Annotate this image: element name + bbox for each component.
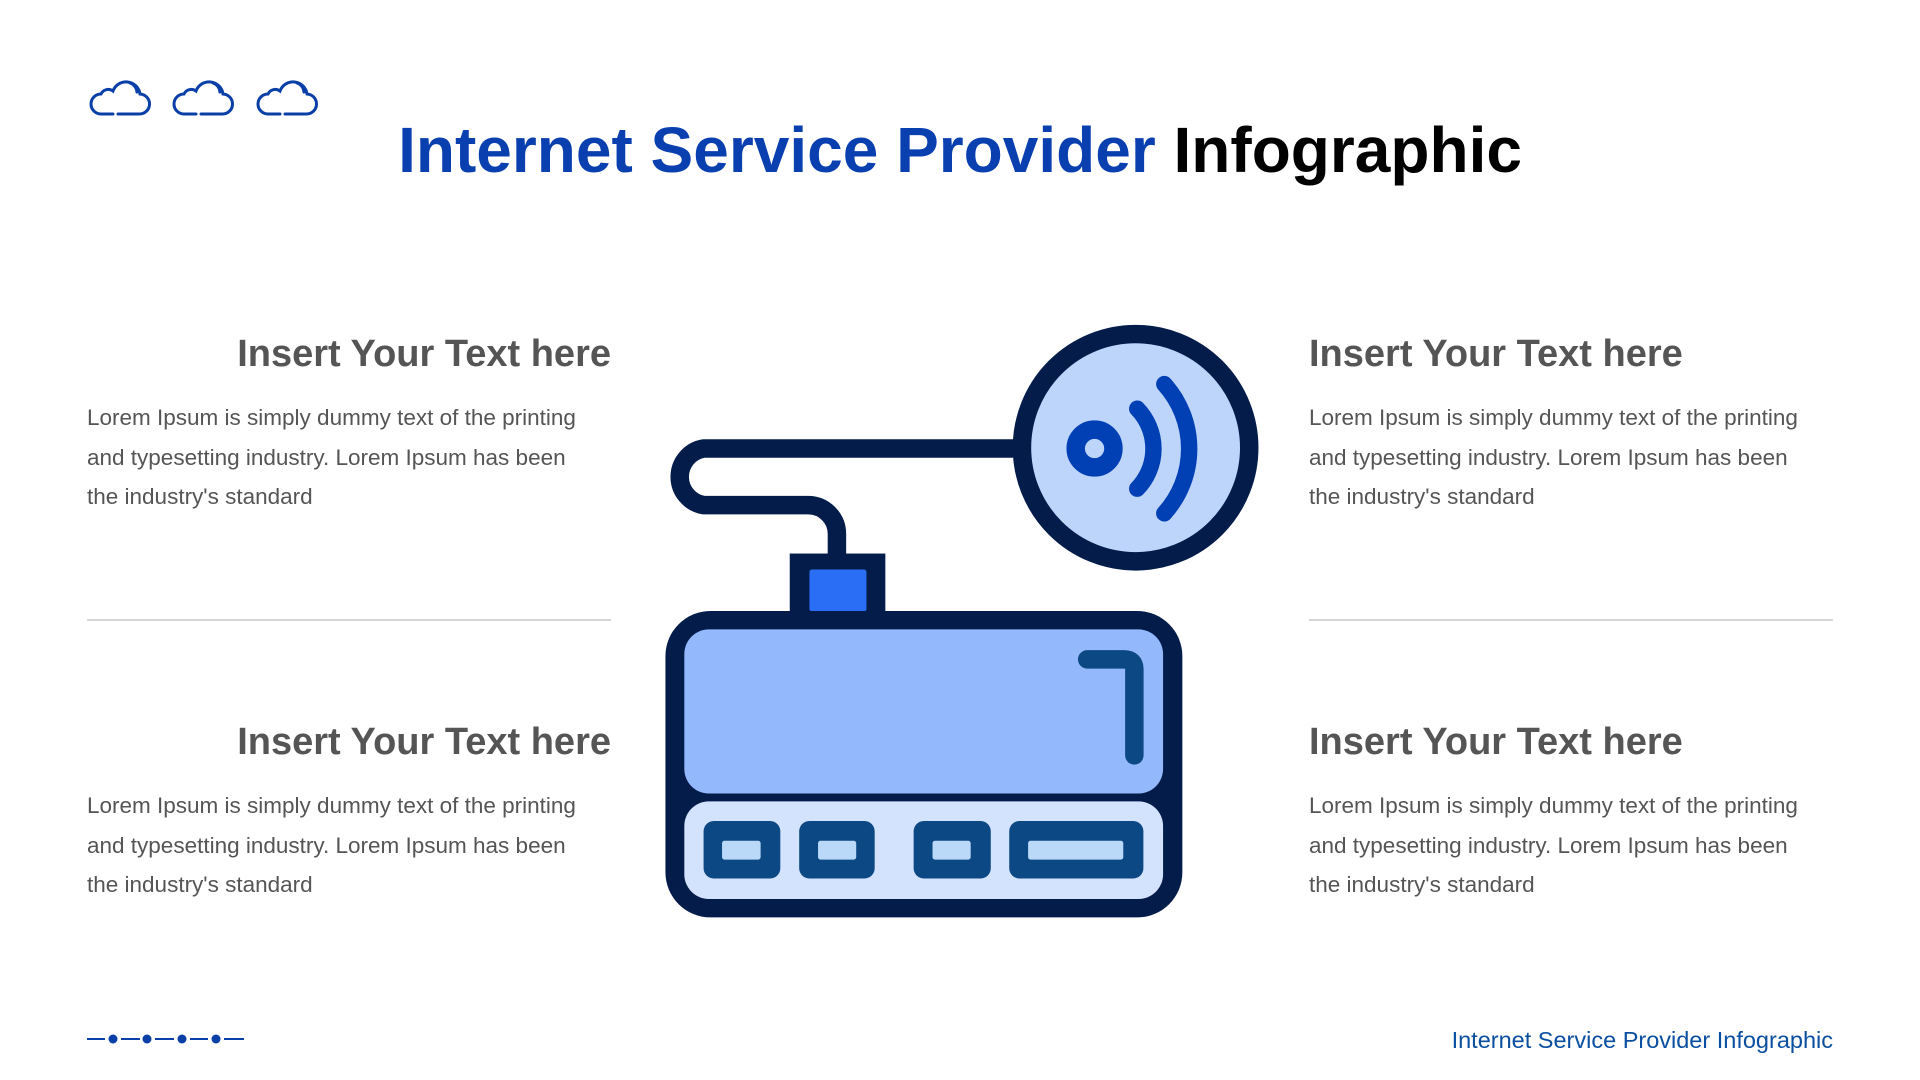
heading: Insert Your Text here (1309, 721, 1683, 763)
text: Lorem Ipsum is simply dummy text of the printing and typesetting industry. Lorem Ipsum has been the industry's standard (1309, 793, 1798, 897)
text: Lorem Ipsum is simply dummy text of the printing and typesetting industry. Lorem Ipsum has been the industry's standard (87, 405, 576, 509)
icon: router with wifi (665, 324, 1258, 918)
panel: top left (87, 333, 611, 509)
footer dots (87, 1034, 244, 1044)
panel: bottom left (87, 721, 611, 897)
text: Lorem Ipsum is simply dummy text of the printing and typesetting industry. Lorem Ipsum has been the industry's standard (87, 793, 576, 897)
heading: Insert Your Text here (237, 721, 611, 763)
text: Lorem Ipsum is simply dummy text of the printing and typesetting industry. Lorem Ipsum has been the industry's standard (1309, 405, 1798, 509)
icons: clouds (90, 80, 318, 116)
heading: Insert Your Text here (1309, 333, 1683, 375)
footer text: Internet Service Provider Infographic (1452, 1027, 1833, 1053)
panel: top right (1309, 333, 1798, 509)
title: Internet Service Provider Infographic (398, 114, 1522, 186)
panel: bottom right (1309, 721, 1798, 897)
heading: Insert Your Text here (237, 333, 611, 375)
